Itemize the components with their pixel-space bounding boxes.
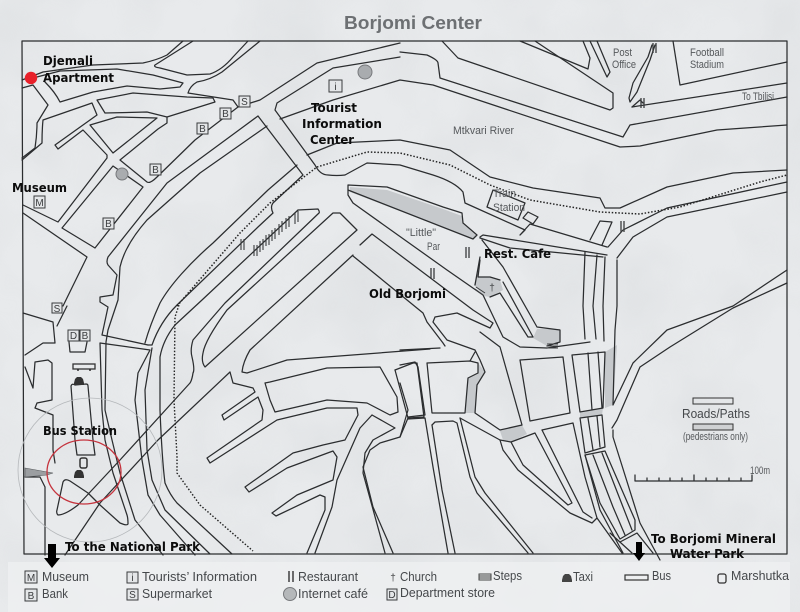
map key: roads: (pedestrians only): [683, 431, 748, 443]
map labels: bold overlays: Center: [310, 133, 354, 147]
map labels: bold overlays: Information: [302, 117, 382, 131]
legend: bank: [25, 586, 68, 602]
map labels: printed: Post: [613, 47, 632, 59]
map key: roads: Roads/Paths: [682, 406, 750, 421]
title: Borjomi Center: [344, 13, 482, 33]
icon: internet cafes: [116, 65, 372, 180]
map labels: printed: Station: [493, 202, 525, 214]
map labels: bold overlays: [12, 54, 776, 561]
scale bar: [635, 465, 770, 481]
icon: department store and bank: D: [70, 331, 77, 342]
map labels: bold overlays: To Borjomi Mineral: [651, 532, 776, 546]
icon: information: [329, 80, 342, 93]
icon: bank 3: [150, 164, 161, 176]
legend: church: Church: [400, 569, 437, 584]
icon: steps: [475, 287, 558, 348]
icon: restaurants: [431, 43, 656, 279]
legend: restaurant: Restaurant: [298, 569, 358, 584]
legend: department store: D: [388, 590, 396, 601]
map labels: bold overlays: Bus Station: [43, 424, 117, 438]
faint circle: [18, 398, 162, 542]
legend: bus: Bus: [652, 568, 671, 583]
map labels: printed: Par: [427, 241, 440, 253]
map labels: printed: [406, 47, 774, 253]
pedestrian dotted path: [174, 302, 253, 551]
railway dotted line: [177, 152, 787, 306]
icon: supermarket west: [52, 303, 62, 315]
icon: bank 3: B: [152, 165, 159, 176]
map labels: printed: "Little": [406, 227, 436, 239]
map labels: printed: To Tbilisi: [742, 91, 774, 103]
map labels: bold overlays: Water Park: [670, 547, 745, 561]
map key: roads: [682, 398, 750, 443]
icon: bank 2: [197, 123, 208, 135]
arrow: to mineral water park: [633, 542, 645, 561]
map labels: printed: Office: [612, 59, 636, 71]
legend: internet cafe: Internet café: [298, 586, 368, 601]
legend: tourists' information: i: [131, 573, 134, 584]
map labels: printed: Stadium: [690, 59, 724, 71]
legend: church: †: [390, 573, 396, 584]
icon: museum: [34, 196, 45, 209]
icon: department store and bank: B: [82, 331, 89, 342]
map labels: bold overlays: To the National Park: [65, 540, 201, 554]
map labels: printed: Train: [493, 188, 516, 200]
scale bar: 100m: [750, 465, 770, 477]
icon: bank 1: B: [222, 109, 229, 120]
icon: bank 4: [103, 218, 114, 230]
icon: restaurants row: [241, 211, 298, 256]
map labels: bold overlays: Tourist: [311, 101, 357, 115]
shaded pedestrian areas: [350, 187, 617, 442]
icon: department store and bank: [68, 330, 90, 342]
icon: bank 2: B: [199, 124, 206, 135]
legend: bank: B: [28, 591, 35, 602]
icon: taxi north: [74, 377, 84, 385]
road network: south-east: [400, 348, 660, 560]
map labels: bold overlays: Old Borjomi: [369, 287, 446, 301]
icon: museum: M: [35, 198, 44, 209]
map labels: bold overlays: Rest. Cafe: [484, 247, 551, 261]
legend: steps: [479, 568, 522, 583]
icon: supermarket top: [239, 96, 250, 108]
legend: bus: [625, 568, 671, 583]
icon: supermarket west: S: [54, 304, 61, 315]
legend: bank: Bank: [42, 586, 68, 601]
icon: bus: [73, 364, 95, 371]
legend: museum: M: [27, 573, 35, 584]
icon: church: †: [489, 283, 495, 294]
legend: supermarket: S: [129, 590, 136, 601]
road network: centre and little park: [65, 185, 590, 555]
icon: information: i: [334, 82, 337, 93]
map labels: bold overlays: Museum: [12, 181, 67, 195]
map labels: printed: Football: [690, 47, 724, 59]
icon: bank 4: B: [105, 219, 112, 230]
road network: west column: [23, 306, 95, 555]
red circle: bus station: [47, 440, 121, 504]
legend: department store: Department store: [400, 585, 495, 600]
map symbols: [25, 43, 656, 504]
icon: bank 1: [220, 108, 231, 120]
arrow: to national park: [44, 544, 60, 568]
legend: taxi: [562, 569, 593, 584]
icon: taxi south: [74, 470, 84, 478]
legend: taxi: Taxi: [573, 569, 593, 584]
legend: marshutka: Marshutka: [731, 568, 790, 583]
icon: marshutka: [80, 458, 87, 468]
legend: museum: Museum: [42, 569, 89, 584]
icon: supermarket top: S: [241, 97, 248, 108]
map labels: bold overlays: Djemali: [43, 54, 93, 68]
legend: supermarket: Supermarket: [142, 586, 212, 601]
red dot: apartment: [25, 72, 37, 84]
road network: north-east: [400, 41, 787, 428]
legend: steps: Steps: [493, 568, 522, 583]
map labels: printed: Mtkvari River: [453, 125, 514, 137]
legend: tourists' information: Tourists’ Information: [142, 569, 257, 584]
map labels: bold overlays: Apartment: [43, 71, 114, 85]
legend: [25, 568, 790, 602]
